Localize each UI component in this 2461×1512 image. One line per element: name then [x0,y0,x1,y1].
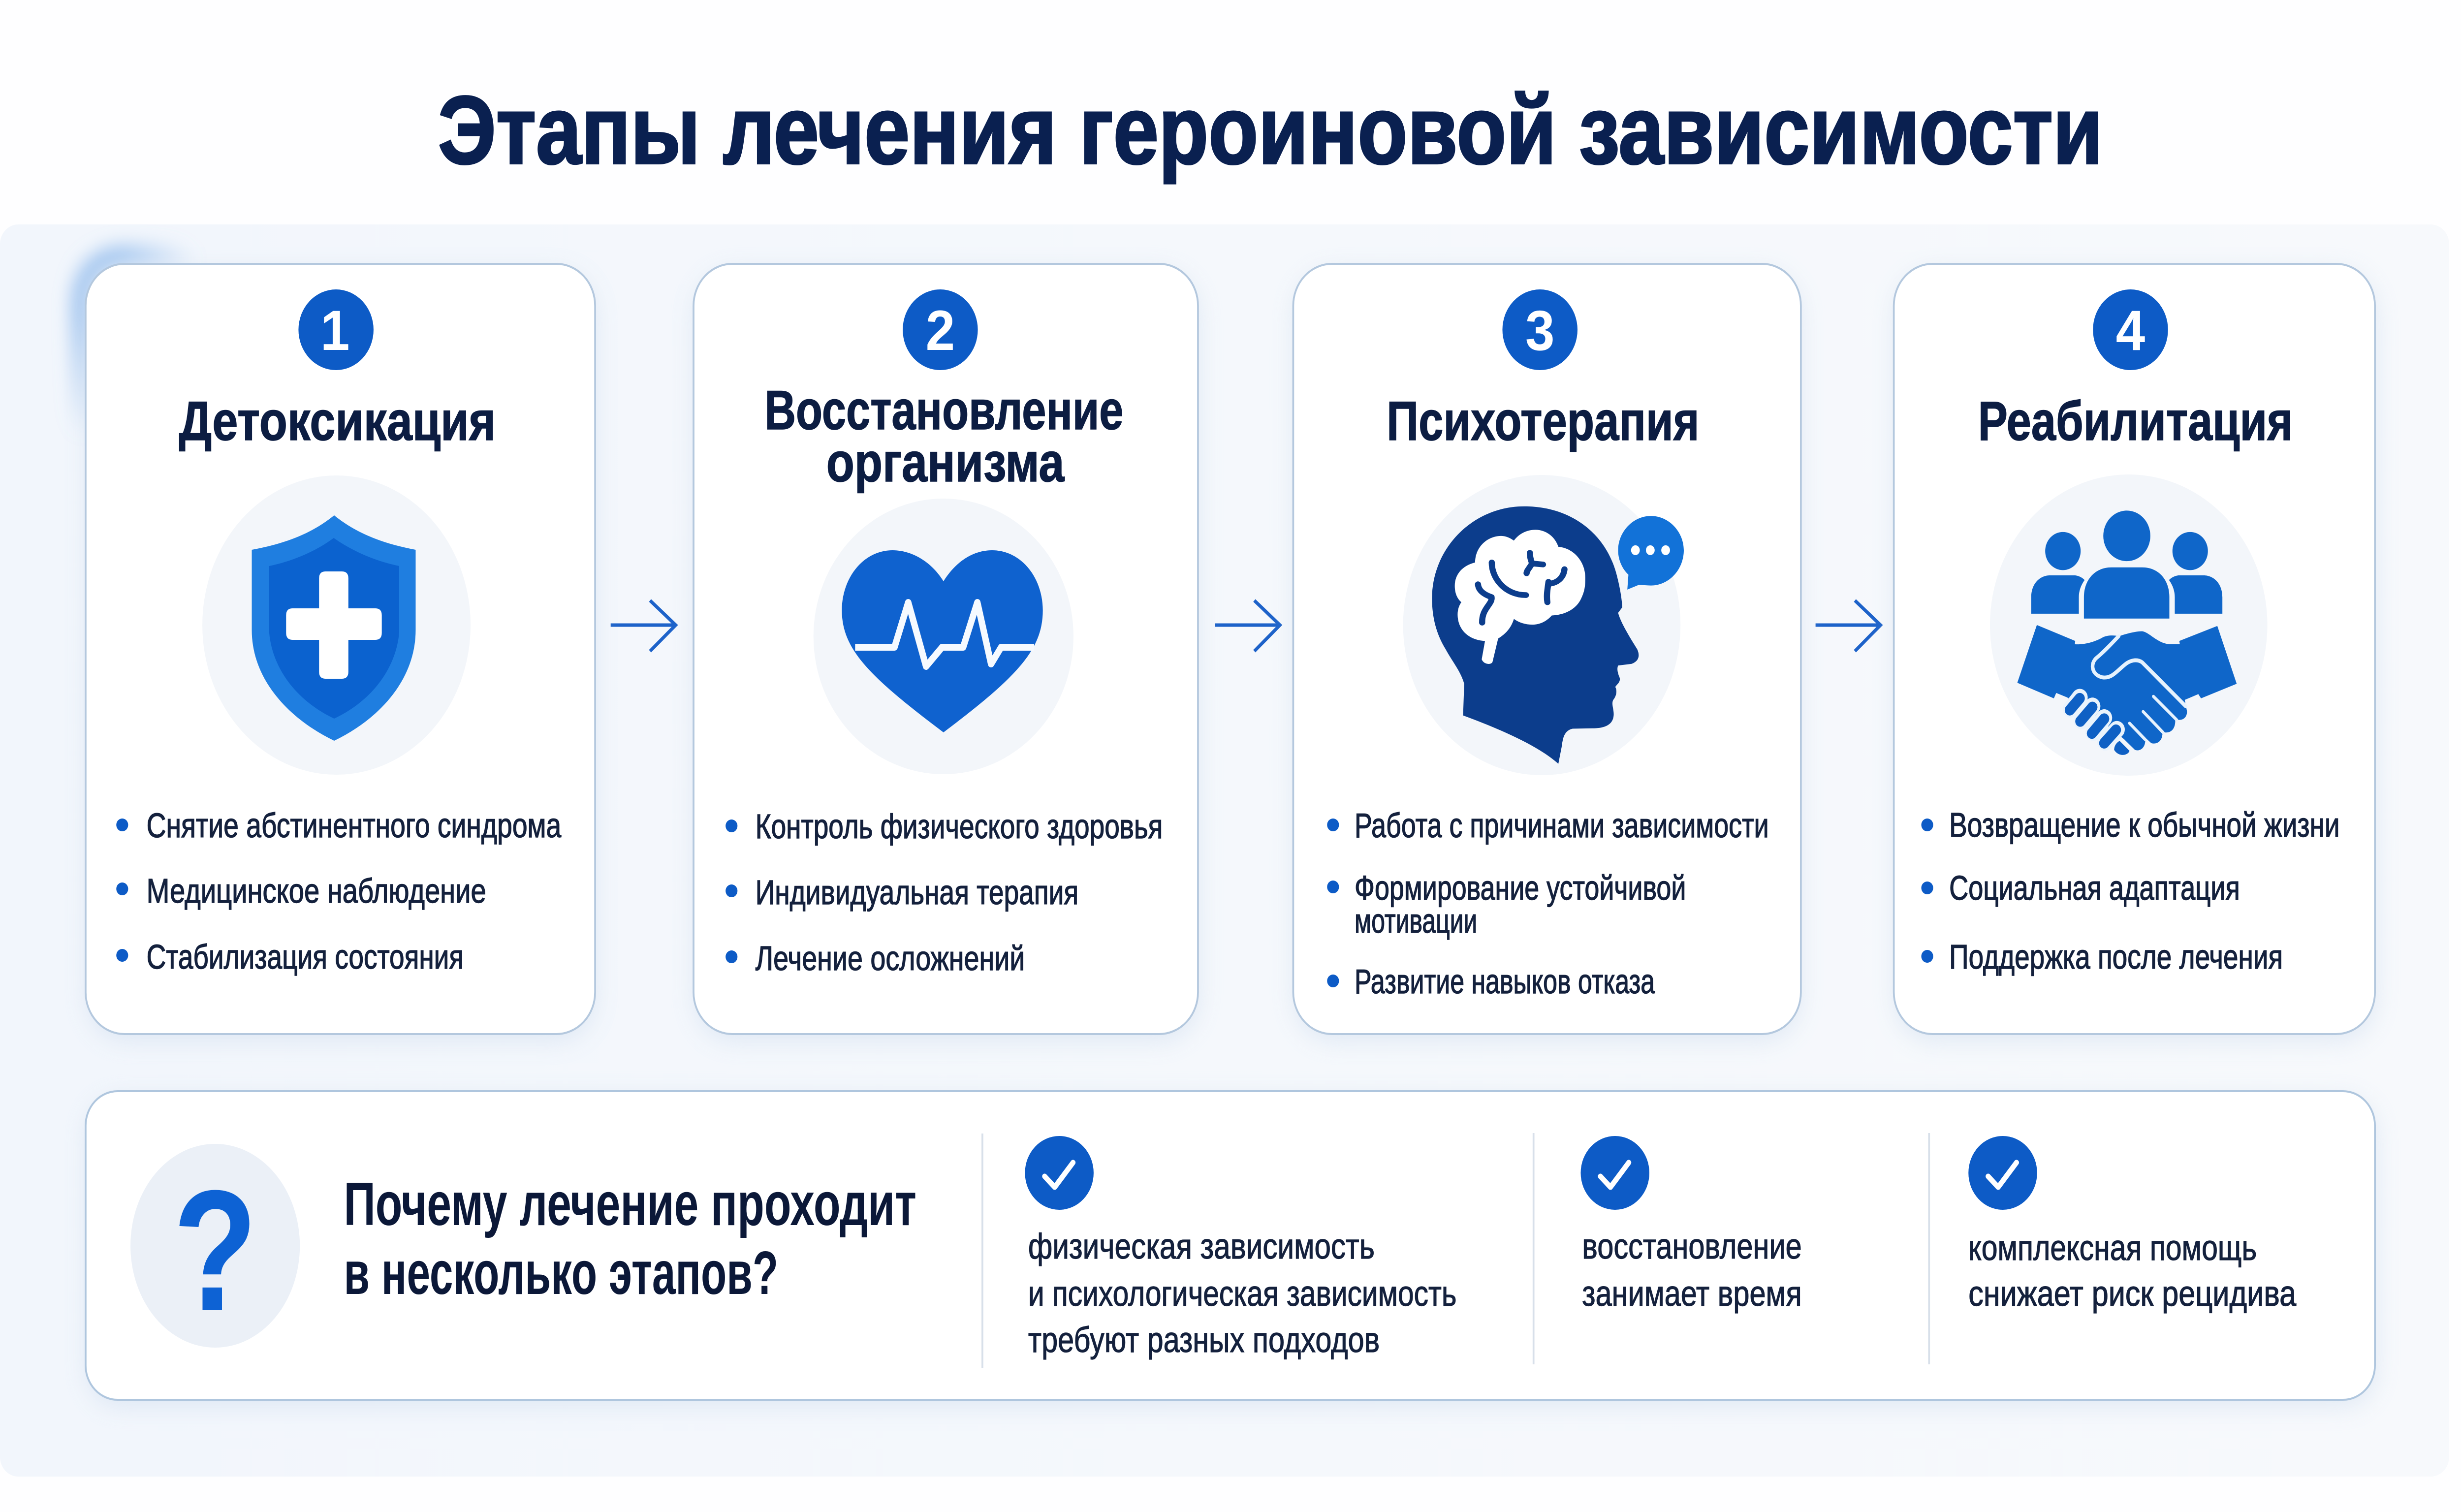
panel: step 4 rehabilitation [1894,264,2376,1040]
heading: why question [344,1170,916,1307]
reason text 1: требуют разных подходов [1028,1320,1380,1360]
step number 3 [1502,289,1578,370]
icon: question mark: ? [173,1154,257,1347]
reason text 2: восстановление [1582,1227,1802,1266]
icon: head with brain and speech bubble [1403,475,1684,775]
heading: recovery: организма [826,432,1065,493]
icon: people and handshake [1990,474,2268,776]
list: detox items: Стабилизация состояния [147,938,464,976]
step number 2: 2 [926,298,955,362]
arrow 2 [1215,600,1280,651]
list: recovery items: Контроль физического здоровья [756,808,1163,846]
icon: check 2 [1580,1136,1649,1210]
list: rehabilitation items: Поддержка после лечения [1949,938,2283,976]
list: psychotherapy items: Формирование устойчивой [1355,869,1686,908]
list: recovery items: Лечение осложнений [756,940,1025,978]
icon: check 1 [1025,1136,1094,1210]
list: rehabilitation items: Возвращение к обычной жизни [1949,806,2340,845]
reason text 2 [1582,1227,1802,1314]
reason text 1: физическая зависимость [1028,1227,1375,1266]
reason 2 [1580,1136,1802,1314]
heading: why question: Почему лечение проходит [344,1170,916,1238]
panel: step 2 recovery [694,264,1199,1040]
arrow 3 [1816,600,1881,651]
list: rehabilitation items [1921,806,2340,976]
reason 1 [1025,1136,1456,1360]
icon: question mark [130,1144,300,1348]
heading: psychotherapy: Психотерапия [1387,390,1699,452]
reason 3 [1968,1136,2296,1314]
heading: why question: в несколько этапов? [344,1239,778,1307]
list: psychotherapy items: мотивации [1355,902,1477,941]
icon: check 3 [1968,1136,2037,1210]
heading: detox: Детоксикация [179,390,496,452]
list: detox items: Снятие абстинентного синдрома [147,807,562,845]
reason text 3: комплексная помощь [1968,1228,2257,1268]
panel: step 3 psychotherapy [1293,264,1801,1040]
list: detox items: Медицинское наблюдение [147,872,486,911]
list: detox items [116,807,562,976]
step number 1: 1 [320,298,350,362]
step number 1 [298,289,374,370]
list: psychotherapy items: Работа с причинами зависимости [1355,807,1769,845]
list: recovery items: Индивидуальная терапия [756,874,1078,912]
heading: rehabilitation: Реабилитация [1978,390,2293,452]
icon: heart with pulse [814,499,1073,774]
reason text 3 [1968,1228,2296,1314]
list: recovery items [726,808,1163,978]
step number 3: 3 [1525,298,1554,362]
heading: recovery [764,379,1123,493]
heading: recovery: Восстановление [764,379,1123,441]
step number 4: 4 [2116,298,2145,362]
title: Этапы лечения героиновой зависимости [438,77,2103,184]
reason text 2: занимает время [1582,1274,1802,1314]
list: rehabilitation items: Социальная адаптация [1949,869,2240,908]
panel: why several stages [86,1091,2376,1406]
step number 4 [2093,289,2168,370]
list: psychotherapy items: Развитие навыков отказа [1355,963,1655,1001]
reason text 3: снижает риск рецидива [1968,1274,2296,1314]
icon: shield with cross [202,475,471,775]
panel: step 1 detox [86,264,595,1040]
step number 2 [903,289,978,370]
list: psychotherapy items [1327,807,1769,1001]
arrow 1 [611,600,676,651]
reason text 1 [1028,1227,1456,1360]
reason text 1: и психологическая зависимость [1028,1274,1456,1314]
